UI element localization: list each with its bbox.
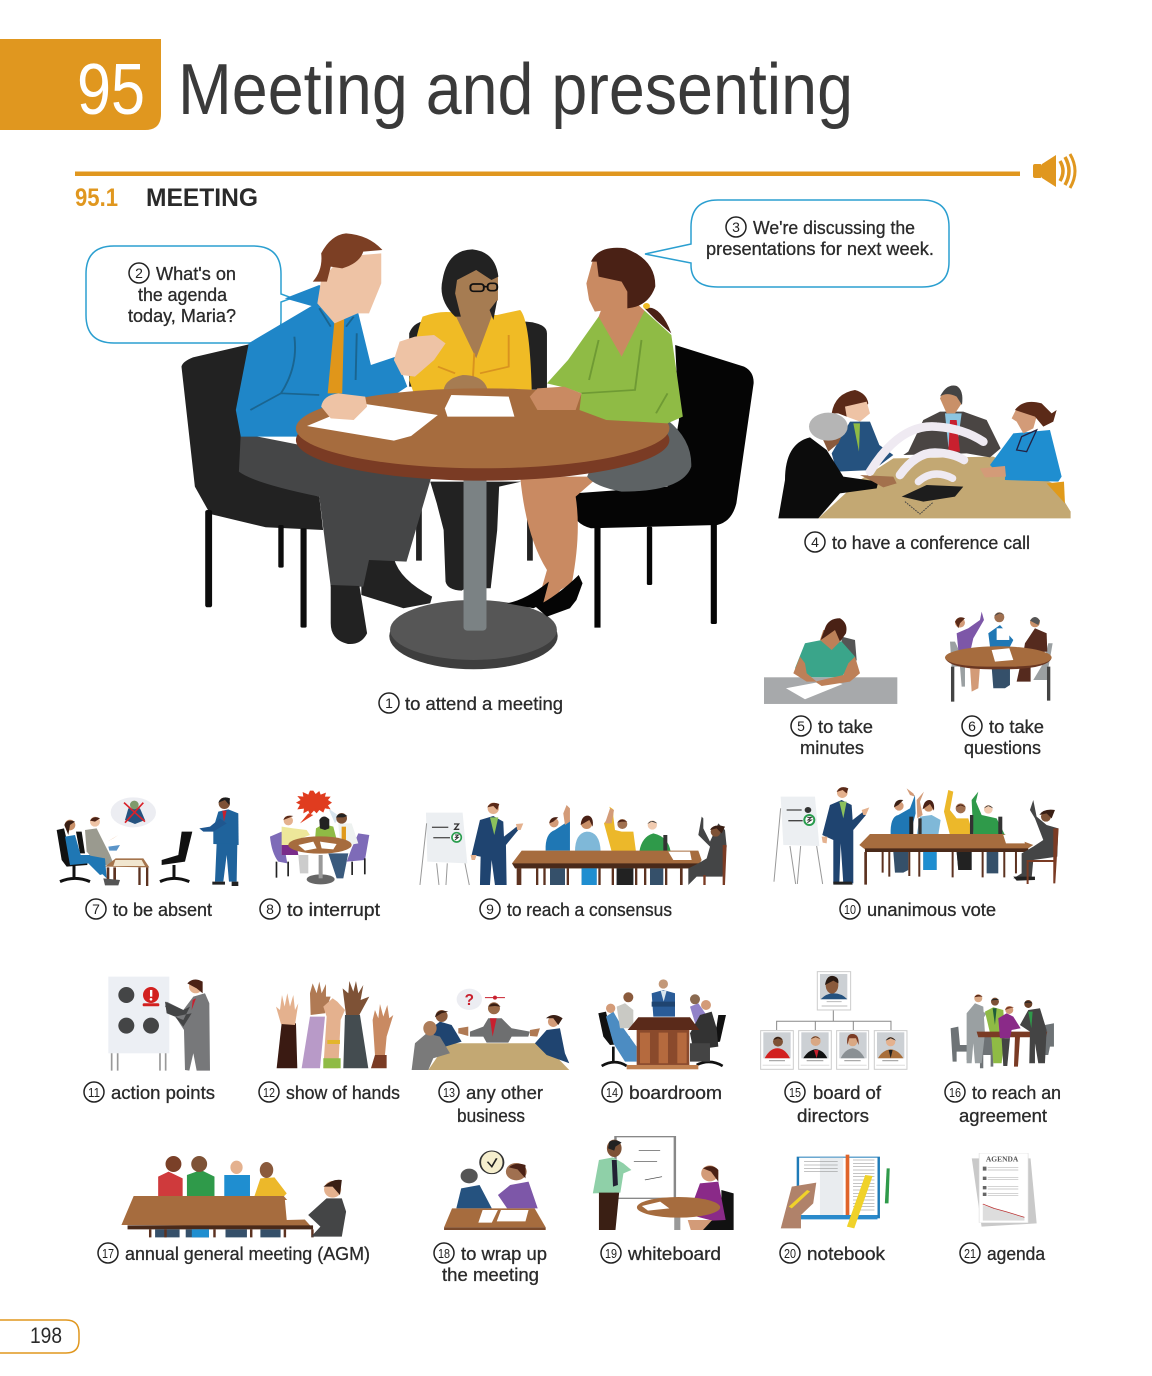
table post and base	[389, 477, 558, 669]
item 16: to reach an agreement	[945, 994, 1061, 1126]
caption: 8	[266, 901, 274, 917]
man head	[313, 233, 382, 323]
illustration	[774, 787, 1059, 885]
speech bubble 3: We're discussing the	[753, 217, 915, 238]
man shirt	[236, 285, 407, 437]
caption	[962, 716, 1044, 758]
item 20: notebook	[780, 1155, 890, 1264]
item 9: to reach a consensus	[420, 803, 727, 920]
section heading	[75, 184, 258, 212]
item 17: annual general meeting	[98, 1156, 370, 1264]
right chair	[570, 345, 754, 628]
caption: whiteboard	[627, 1243, 721, 1264]
caption: 11	[88, 1085, 100, 1100]
header tab with chapter number	[0, 39, 161, 130]
caption	[785, 1082, 882, 1126]
caption: business	[457, 1105, 525, 1126]
illustration	[108, 977, 210, 1071]
item 4: to have a conference call	[778, 386, 1071, 553]
item 15: board of directors	[761, 972, 907, 1126]
caption	[434, 1243, 547, 1285]
speech bubble 2: the agenda	[138, 284, 228, 305]
item 14: boardroom	[598, 979, 726, 1103]
caption 1: 1	[385, 695, 393, 711]
illustration: ?	[465, 992, 474, 1009]
illustration	[121, 1156, 346, 1237]
speech bubble 2: 2	[135, 265, 143, 281]
caption: 21	[964, 1246, 976, 1261]
icon: audio speaker	[1033, 154, 1075, 188]
section heading: 95.1	[75, 184, 118, 212]
caption	[439, 1082, 543, 1126]
illustration	[598, 979, 726, 1069]
caption: any other	[466, 1082, 543, 1103]
caption	[791, 716, 873, 758]
caption: to reach a consensus	[507, 899, 672, 920]
caption: agenda	[987, 1243, 1046, 1264]
page number: 198	[30, 1323, 62, 1348]
main illustration: to attend a meeting	[181, 233, 754, 669]
item 6: to take questions	[945, 612, 1053, 758]
caption: to interrupt	[287, 899, 380, 920]
caption: 6	[968, 718, 976, 734]
caption: notebook	[807, 1243, 886, 1264]
illustration	[412, 989, 569, 1070]
speech bubble 3	[645, 200, 949, 287]
caption: 4	[811, 534, 819, 550]
illustration	[276, 981, 393, 1068]
caption: to have a conference call	[832, 532, 1030, 553]
item 7: to be absent	[57, 797, 239, 920]
table top	[296, 388, 669, 481]
caption: show of hands	[286, 1082, 400, 1103]
item 8: to interrupt	[260, 791, 380, 920]
caption: agreement	[959, 1105, 1047, 1126]
caption: 17	[102, 1246, 114, 1261]
green woman	[530, 248, 683, 423]
caption: board of	[813, 1082, 882, 1103]
item 18: to wrap up the meeting	[434, 1151, 547, 1285]
caption	[960, 1243, 1046, 1264]
middle chair	[409, 322, 547, 561]
left chair	[181, 344, 381, 628]
section heading: MEETING	[146, 184, 258, 212]
caption: 13	[443, 1085, 455, 1100]
caption: to wrap up	[461, 1243, 547, 1264]
header tab with chapter number: 95	[77, 50, 145, 130]
caption: the meeting	[442, 1264, 539, 1285]
caption: directors	[797, 1105, 869, 1126]
illustration	[57, 797, 239, 886]
caption: 19	[605, 1246, 617, 1261]
caption: 7	[92, 901, 100, 917]
green woman skirt and legs	[507, 420, 691, 617]
illustration: AGENDA	[986, 1155, 1018, 1163]
caption: action points	[111, 1082, 215, 1103]
caption: 16	[949, 1085, 961, 1100]
caption: 20	[784, 1246, 796, 1261]
item 19: whiteboard	[593, 1137, 734, 1264]
speech bubble 2: today, Maria?	[128, 305, 236, 326]
illustration	[945, 612, 1053, 702]
caption: 10	[844, 902, 856, 917]
item 10: unanimous vote	[774, 787, 1059, 920]
illustration	[593, 1137, 734, 1230]
man hands	[321, 335, 446, 420]
caption: to reach an	[972, 1082, 1061, 1103]
speech bubble 2	[86, 246, 292, 343]
page number	[0, 1320, 79, 1353]
caption: 12	[263, 1085, 275, 1100]
caption: questions	[964, 737, 1041, 758]
item 12: show of hands	[259, 981, 400, 1103]
caption: annual general meeting (AGM)	[125, 1243, 370, 1264]
caption: unanimous vote	[867, 899, 996, 920]
middle woman	[409, 249, 532, 591]
item 11: action points	[84, 977, 215, 1103]
speech bubble 3: presentations for next week.	[706, 238, 934, 259]
seated man legs	[239, 433, 432, 644]
item 13: any other business	[412, 989, 569, 1126]
caption: to be absent	[113, 899, 212, 920]
caption: to take	[818, 716, 873, 737]
caption: 15	[789, 1085, 801, 1100]
caption: 14	[606, 1085, 618, 1100]
caption	[945, 1082, 1061, 1126]
title: Meeting and presenting	[178, 50, 853, 130]
illustration	[270, 791, 369, 884]
caption: to take	[989, 716, 1044, 737]
illustration	[951, 994, 1054, 1068]
caption: 18	[438, 1246, 450, 1261]
illustration	[420, 803, 727, 885]
caption: 9	[486, 901, 494, 917]
caption: minutes	[800, 737, 864, 758]
caption: 5	[797, 718, 805, 734]
caption 1: to attend a meeting	[405, 693, 563, 714]
illustration	[761, 972, 907, 1069]
illustration	[764, 618, 897, 704]
caption: boardroom	[629, 1082, 722, 1103]
papers	[307, 395, 514, 441]
illustration	[444, 1151, 546, 1230]
speech bubble 2: What's on	[156, 263, 236, 284]
illustration	[778, 386, 1071, 518]
speech bubble 3: 3	[732, 219, 740, 235]
item 5: to take minutes	[764, 618, 897, 758]
illustration	[781, 1155, 890, 1228]
item 21: agenda	[960, 1153, 1046, 1264]
